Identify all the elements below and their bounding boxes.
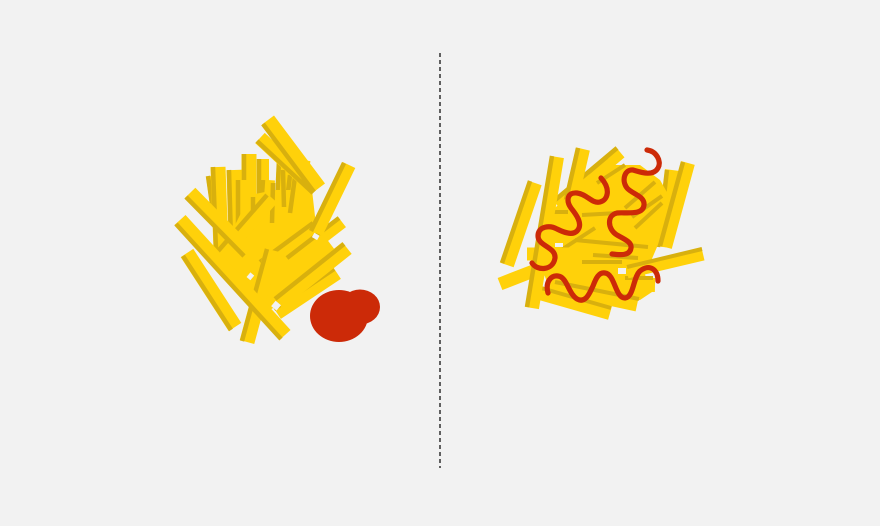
ketchup squiggle: right diagonal (610, 150, 659, 255)
fries pile: left (176, 120, 349, 342)
illustration: fries piled with ketchup on the side (176, 120, 380, 342)
divider: dashed vertical line (439, 53, 441, 468)
ketchup squiggle: left diagonal (532, 178, 607, 268)
fries pile: right (500, 148, 703, 313)
ketchup squiggle: bottom horizontal (547, 268, 658, 300)
illustration: fries with ketchup squiggled on top (500, 148, 703, 313)
ketchup blob (310, 290, 380, 342)
central mass (222, 190, 335, 310)
